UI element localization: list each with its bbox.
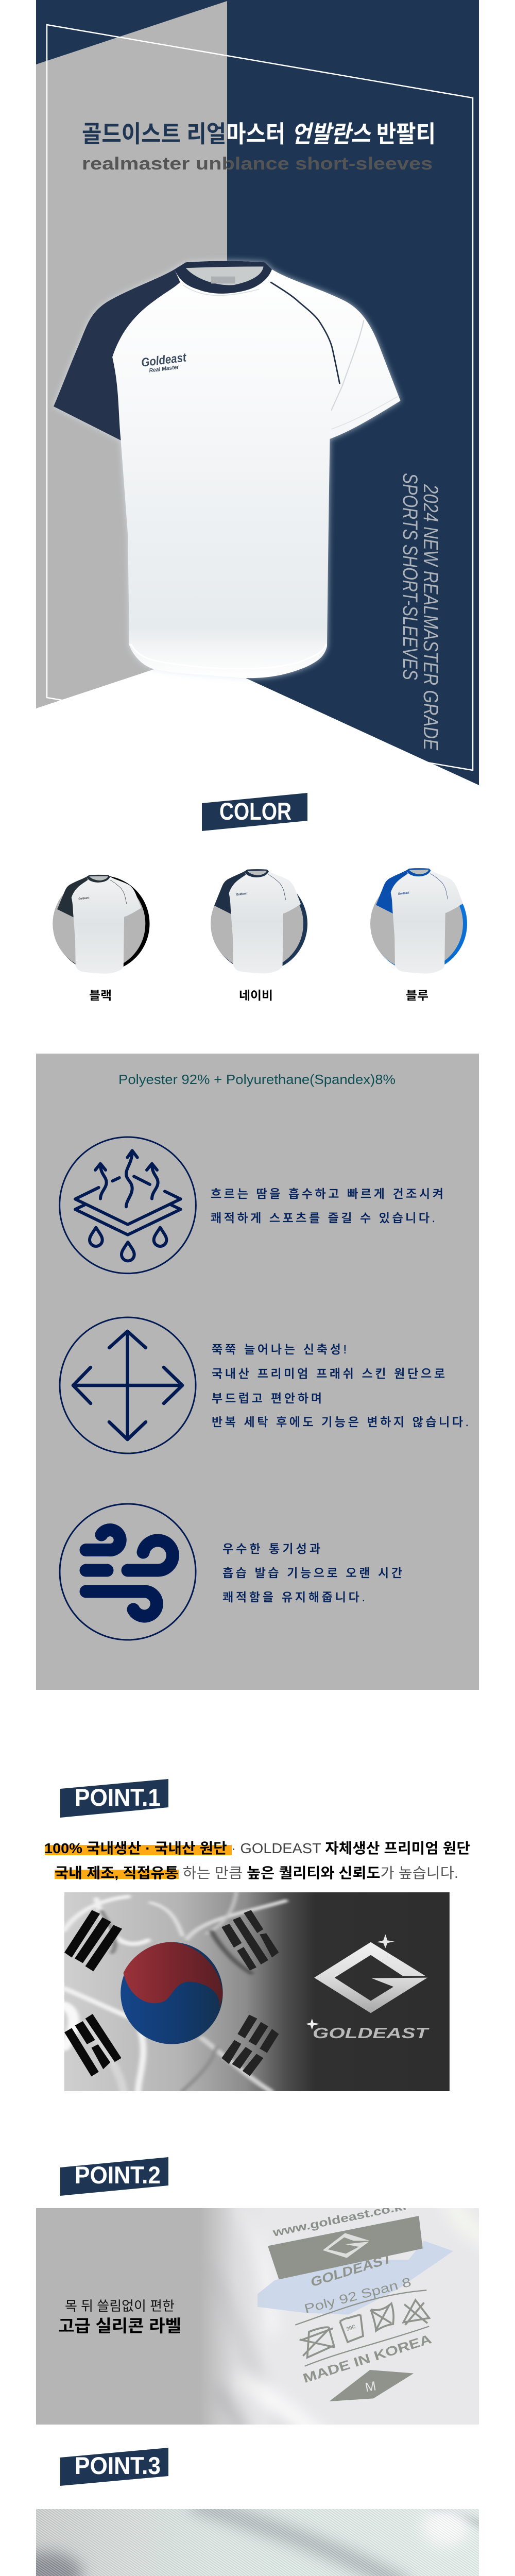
- point 3 badge: [60, 2448, 168, 2486]
- text: breathable: 쾌적함을 유지해줍니다.: [222, 1590, 365, 1604]
- point 1 description: [44, 1840, 470, 1881]
- point 1 badge: POINT.1: [75, 1784, 161, 1811]
- panel: silicone label photo: [36, 2208, 479, 2425]
- label: black: 블랙: [89, 989, 112, 1002]
- image: Korean flag and Goldeast logo: [64, 1892, 450, 2091]
- label: navy: 네이비: [239, 989, 273, 1002]
- text: stretch: 반복 세탁 후에도 기능은 변하지 않습니다.: [212, 1415, 469, 1429]
- hero panel: [36, 0, 479, 824]
- flag trigrams: [64, 1910, 122, 2076]
- text: breathable: 흡습 발습 기능으로 오랜 시간: [222, 1566, 402, 1580]
- icon: four-way stretch: [60, 1317, 196, 1453]
- text: breathable: 우수한 통기성과: [222, 1542, 320, 1555]
- main t-shirt: [54, 261, 401, 678]
- point 1 badge: [60, 1779, 168, 1818]
- label print: GOLDEAST: [309, 2251, 395, 2290]
- icon: breathable airflow: [60, 1504, 196, 1640]
- text: stretch: 국내산 프리미엄 프래쉬 스킨 원단으로: [212, 1367, 445, 1380]
- vertical caption line 1: 2024 NEW REALMASTER GRADE: [419, 484, 442, 751]
- label print: Poly 92 Span 8: [303, 2275, 413, 2316]
- logo wordmark: GOLDEAST: [313, 2025, 430, 2042]
- icon: sweat wicking: [60, 1137, 196, 1274]
- navy background: [36, 0, 479, 788]
- color option: black: Goldeast: [78, 896, 90, 901]
- shirt logo: Real Master: [149, 364, 180, 374]
- gray angled panel: [36, 1, 227, 721]
- panel: silicone label photo: 고급 실리콘 라벨: [58, 2316, 181, 2335]
- point 1 description: 100% 국내생산 · 국내산 원단 · GOLDEAST 자체생산 프리미엄 원단: [44, 1840, 470, 1856]
- label print: M: [364, 2379, 377, 2395]
- text: sweat wicking: 쾌적하게 스포츠를 즐길 수 있습니다.: [211, 1211, 435, 1225]
- white cut-out below the hero: [36, 655, 479, 824]
- point 2 badge: POINT.2: [75, 2161, 161, 2189]
- fabric composition: Polyester 92% + Polyurethane(Spandex)8%: [118, 1072, 396, 1087]
- text: sweat wicking: [211, 1187, 443, 1225]
- label: blue: 블루: [406, 989, 428, 1002]
- color option: black: [53, 875, 149, 1002]
- hero title: 골드이스트 리얼마스터 언발란스 반팔티: [82, 121, 436, 147]
- taegeuk: [121, 1942, 223, 2044]
- satin folds: [64, 1892, 285, 2091]
- color option: blue: Goldeast: [398, 891, 410, 896]
- color heading badge: COLOR: [219, 798, 291, 825]
- white outline frame: [47, 25, 473, 770]
- color heading badge: [202, 793, 307, 831]
- point 3 badge: POINT.3: [75, 2452, 161, 2479]
- panel: fabric features: [36, 1054, 479, 1690]
- shirt logo: Goldeast: [141, 350, 187, 369]
- gray fade: [36, 2208, 251, 2425]
- fabric folds: [216, 2208, 479, 2425]
- label print: www.goldeast.co.kr: [271, 2199, 409, 2239]
- point 1 description: 국내 제조, 직접유통 하는 만큼 높은 퀄리티와 신뢰도 가 높습니다.: [55, 1865, 458, 1881]
- point 2 badge: [60, 2157, 168, 2196]
- text: sweat wicking: 흐르는 땀을 흡수하고 빠르게 건조시켜: [211, 1187, 443, 1200]
- label print: 30C: [346, 2324, 356, 2332]
- color option: navy: [211, 869, 307, 1002]
- image: fabric close-up: [36, 2509, 479, 2576]
- vertical caption line 2: SPORTS SHORT-SLEEVES: [399, 473, 421, 680]
- Goldeast G logo: [314, 1942, 427, 2013]
- color option: blue: [370, 868, 467, 1002]
- label print: MADE IN KOREA: [301, 2332, 433, 2386]
- label caption: 목 뒤 쓸림없이 편한: [65, 2298, 175, 2314]
- text: stretch: 부드럽고 편안하며: [212, 1392, 322, 1405]
- hero subtitle: realmaster unblance short-sleeves: [82, 154, 433, 174]
- text: stretch: 쭉쭉 늘어나는 신축성!: [212, 1343, 347, 1356]
- shirt logo: [141, 350, 188, 375]
- text: breathable: [222, 1542, 402, 1604]
- label print: [258, 2199, 453, 2401]
- text: stretch: [212, 1343, 469, 1429]
- color option: navy: Goldeast: [236, 892, 248, 896]
